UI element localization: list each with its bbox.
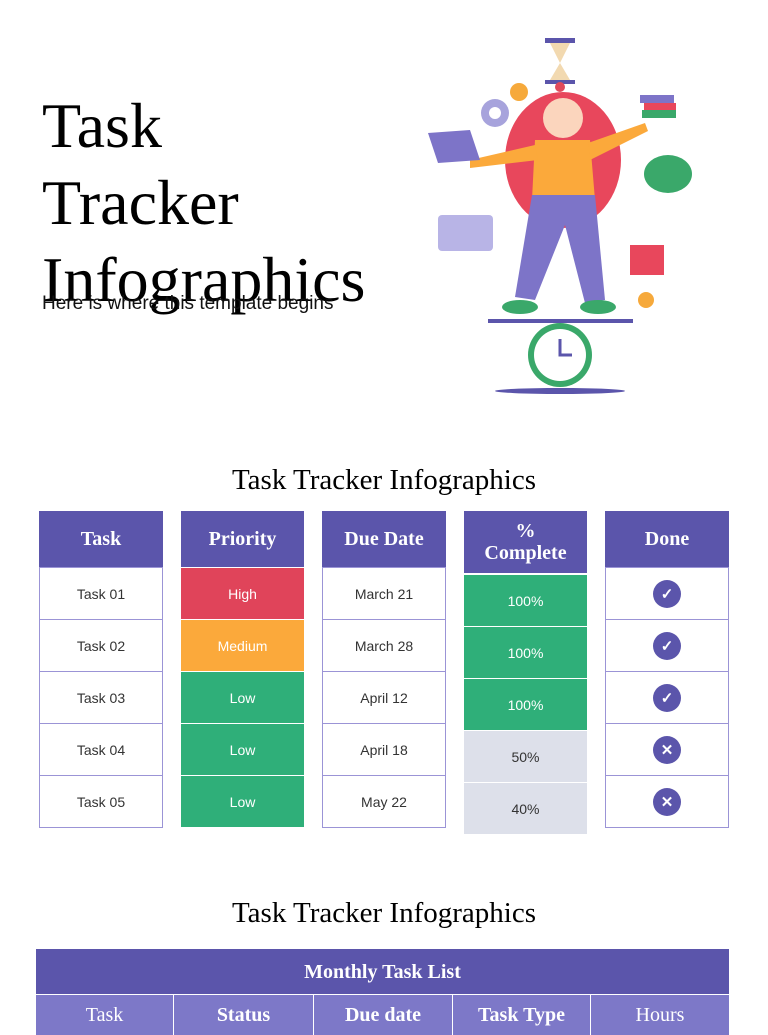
face — [543, 98, 583, 138]
table: task tracker: Low — [230, 690, 255, 706]
table: task tracker: 50% — [511, 748, 540, 764]
title — [42, 90, 365, 315]
table: task tracker: 100% — [508, 696, 543, 712]
title: Tracker — [42, 167, 239, 238]
table: task tracker: Task 02 — [77, 638, 125, 654]
table: monthly task list: Monthly Task List — [304, 960, 461, 982]
body — [532, 140, 595, 200]
board & clock — [488, 319, 633, 323]
table: task tracker: 100% — [508, 592, 543, 608]
table: task tracker: ✕ — [661, 794, 673, 810]
column: Task — [39, 511, 163, 828]
calendar — [438, 215, 493, 251]
table: task tracker: ✕ — [661, 742, 673, 758]
table: monthly task list: Hours — [636, 1004, 684, 1026]
table: task tracker: April 12 — [360, 690, 408, 706]
hair — [505, 92, 621, 228]
gears — [481, 99, 509, 127]
table: monthly task list: Status — [217, 1004, 270, 1026]
table: monthly task list: Task Type — [478, 1004, 565, 1026]
table: task tracker: Task 04 — [77, 742, 125, 758]
hourglass — [545, 38, 575, 92]
heading: table 1: Task Tracker Infographics — [232, 464, 536, 496]
laptop — [428, 130, 480, 163]
sticky notes — [630, 245, 664, 275]
column: Due Date — [322, 511, 446, 828]
table: monthly task list: Due date — [345, 1004, 421, 1026]
table: task tracker: ✓ — [661, 586, 673, 602]
title: Infographics — [42, 244, 365, 315]
table: task tracker: March 28 — [355, 638, 413, 654]
legs — [515, 195, 605, 303]
table: task tracker: Priority — [209, 528, 276, 550]
table: task tracker: April 18 — [360, 742, 408, 758]
heading: table 2: Task Tracker Infographics — [232, 897, 536, 929]
column: Done — [605, 511, 729, 828]
chat — [644, 155, 692, 193]
table: task tracker: Task 01 — [77, 586, 125, 602]
table: task tracker: Done — [645, 528, 689, 550]
table: task tracker: 100% — [508, 644, 543, 660]
table: task tracker: ✓ — [661, 638, 673, 654]
table: task tracker: % — [515, 520, 535, 542]
column: Priority — [181, 511, 304, 827]
table: task tracker: 40% — [511, 800, 540, 816]
table: task tracker: Low — [230, 742, 255, 758]
books — [640, 95, 674, 103]
table: task tracker: Due Date — [344, 528, 424, 550]
table: task tracker: Task — [81, 528, 121, 550]
table: task tracker: ✓ — [661, 690, 673, 706]
table: task tracker: Low — [230, 794, 255, 810]
table: task tracker: High — [228, 586, 257, 602]
table: task tracker: March 21 — [355, 586, 413, 602]
table: monthly task list: Task — [86, 1004, 123, 1026]
table: task tracker: May 22 — [361, 794, 407, 810]
table: task tracker: Complete — [484, 542, 567, 564]
table: monthly task list — [36, 949, 729, 1035]
table: task tracker: Medium — [218, 638, 267, 654]
illustration: woman balancing tasks — [428, 38, 692, 394]
column: % Complete — [464, 511, 587, 834]
table: task tracker: Task 03 — [77, 690, 125, 706]
table: task tracker: Task 05 — [77, 794, 125, 810]
subtitle: Here is where this template begins — [42, 293, 333, 314]
title: Task — [42, 90, 162, 161]
